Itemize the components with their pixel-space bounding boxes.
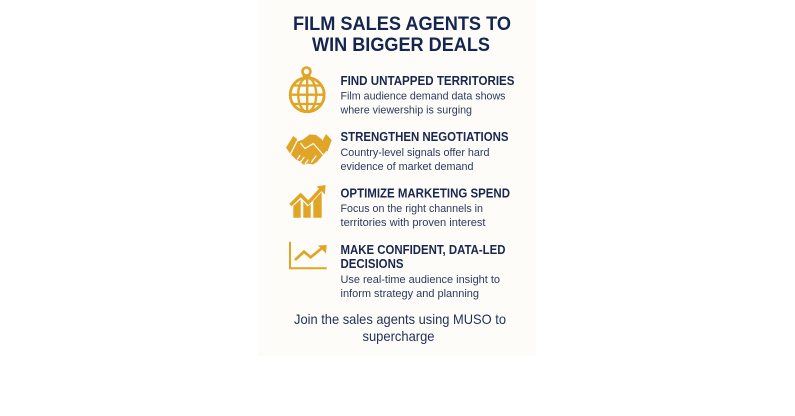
icon: handshake xyxy=(286,134,332,165)
text block: optimize marketing spend: territories with proven interest xyxy=(340,217,486,229)
text block: make confident, data-led decisions: Use real-time audience insight to xyxy=(340,274,500,286)
call to action: supercharge xyxy=(362,329,434,344)
text block: find untapped territories xyxy=(340,74,514,116)
panel: background card xyxy=(258,0,536,356)
icon: bars with rising arrow xyxy=(290,185,326,218)
call to action: Join the sales agents using MUSO to xyxy=(294,312,506,327)
text block: optimize marketing spend: Focus on the right channels in xyxy=(340,203,483,215)
icon: line chart with arrow xyxy=(290,242,327,268)
icon: globe with pin xyxy=(290,68,324,112)
title xyxy=(293,13,511,56)
text block: strengthen negotiations: evidence of market demand xyxy=(340,161,474,173)
text block: make confident, data-led decisions: MAKE CONFIDENT, DATA-LED xyxy=(340,243,506,257)
text block: make confident, data-led decisions: inform strategy and planning xyxy=(340,288,479,300)
text block: find untapped territories: Film audience demand data shows xyxy=(340,90,506,102)
title: WIN BIGGER DEALS xyxy=(312,34,490,56)
text block: make confident, data-led decisions: DECISIONS xyxy=(340,257,404,271)
text block: strengthen negotiations xyxy=(340,130,508,173)
text block: strengthen negotiations: Country-level signals offer hard xyxy=(340,147,490,159)
text block: optimize marketing spend xyxy=(340,186,510,229)
text block: strengthen negotiations: STRENGTHEN NEGOTIATIONS xyxy=(340,130,508,144)
text block: make confident, data-led decisions xyxy=(340,243,506,300)
text block: optimize marketing spend: OPTIMIZE MARKETING SPEND xyxy=(340,186,510,200)
text block: find untapped territories: FIND UNTAPPED TERRITORIES xyxy=(340,74,514,88)
title: FILM SALES AGENTS TO xyxy=(293,13,511,35)
call to action xyxy=(294,312,506,344)
text block: find untapped territories: where viewership is surging xyxy=(340,104,472,116)
